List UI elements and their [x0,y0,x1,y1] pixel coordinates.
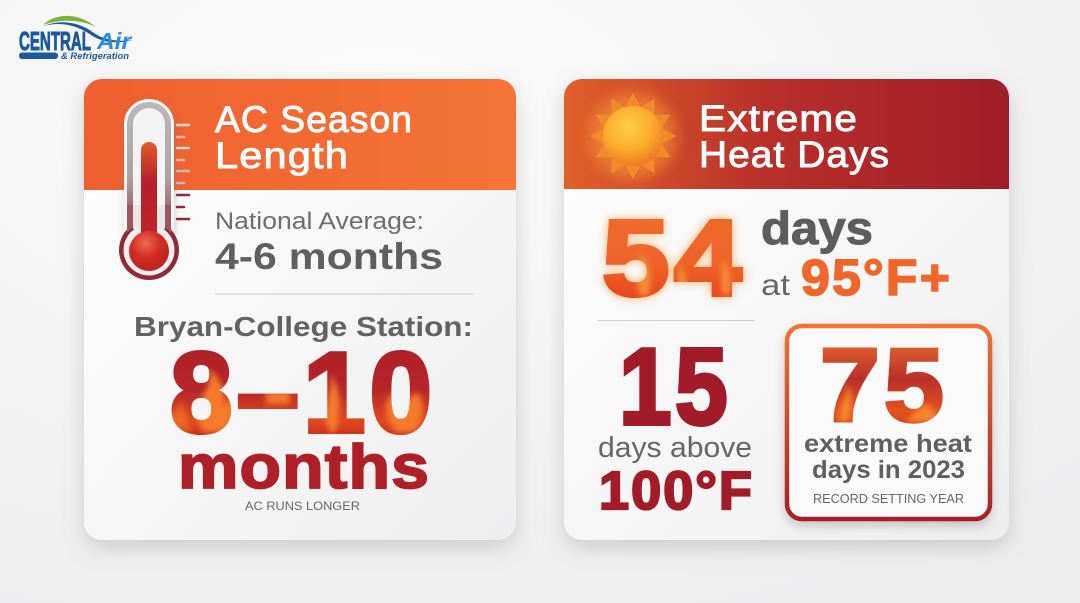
icon: logo swoosh [43,16,133,42]
panel header band [84,79,516,190]
panel background [84,79,516,540]
text: days: days [761,202,873,254]
stat: 8–10: 8–10 [170,330,436,457]
stat: 75: 75 [820,328,948,444]
callout: record setting year [787,326,990,519]
icon: sun [589,92,677,180]
heading [699,98,890,175]
heading: Length [215,135,349,176]
panel background [564,79,1009,540]
caption: RECORD SETTING YEAR [813,492,964,506]
panel: AC Season Length [84,79,516,540]
caption: AC RUNS LONGER [245,499,360,513]
stat: 100°F: 100°F [599,461,754,521]
callout box [787,326,990,519]
heading: Extreme [699,98,858,139]
logo bar [19,52,58,59]
text: extreme heat days in 2023: extreme heat [804,430,973,458]
heading: Heat Days [699,134,890,175]
stat: 15: 15 [619,326,731,448]
text: Bryan-College Station label: Bryan-College Station: [134,311,473,342]
panel: Extreme Heat Days [564,79,1009,540]
logo: Central Air & Refrigeration [19,16,133,62]
text: at: at [761,269,791,302]
text: national average label: National Average: [215,208,424,235]
heading: AC Season [215,99,413,140]
stat: months: months [178,433,430,502]
text: extreme heat days in 2023 [804,430,973,484]
panel header band [564,79,1009,189]
logo tagline: & Refrigeration [61,51,129,62]
logo word: CENTRAL: CENTRAL [19,26,91,56]
heading [215,99,413,176]
text: days above: days above [598,432,752,464]
text: extreme heat days in 2023: days in 2023 [812,456,965,484]
stat: 54: 54 [602,197,746,318]
text: national average value: 4-6 months [215,236,443,277]
logo word: Air: Air [96,28,132,54]
stat: 95°F+: 95°F+ [801,249,952,306]
icon: thermometer [119,99,189,280]
